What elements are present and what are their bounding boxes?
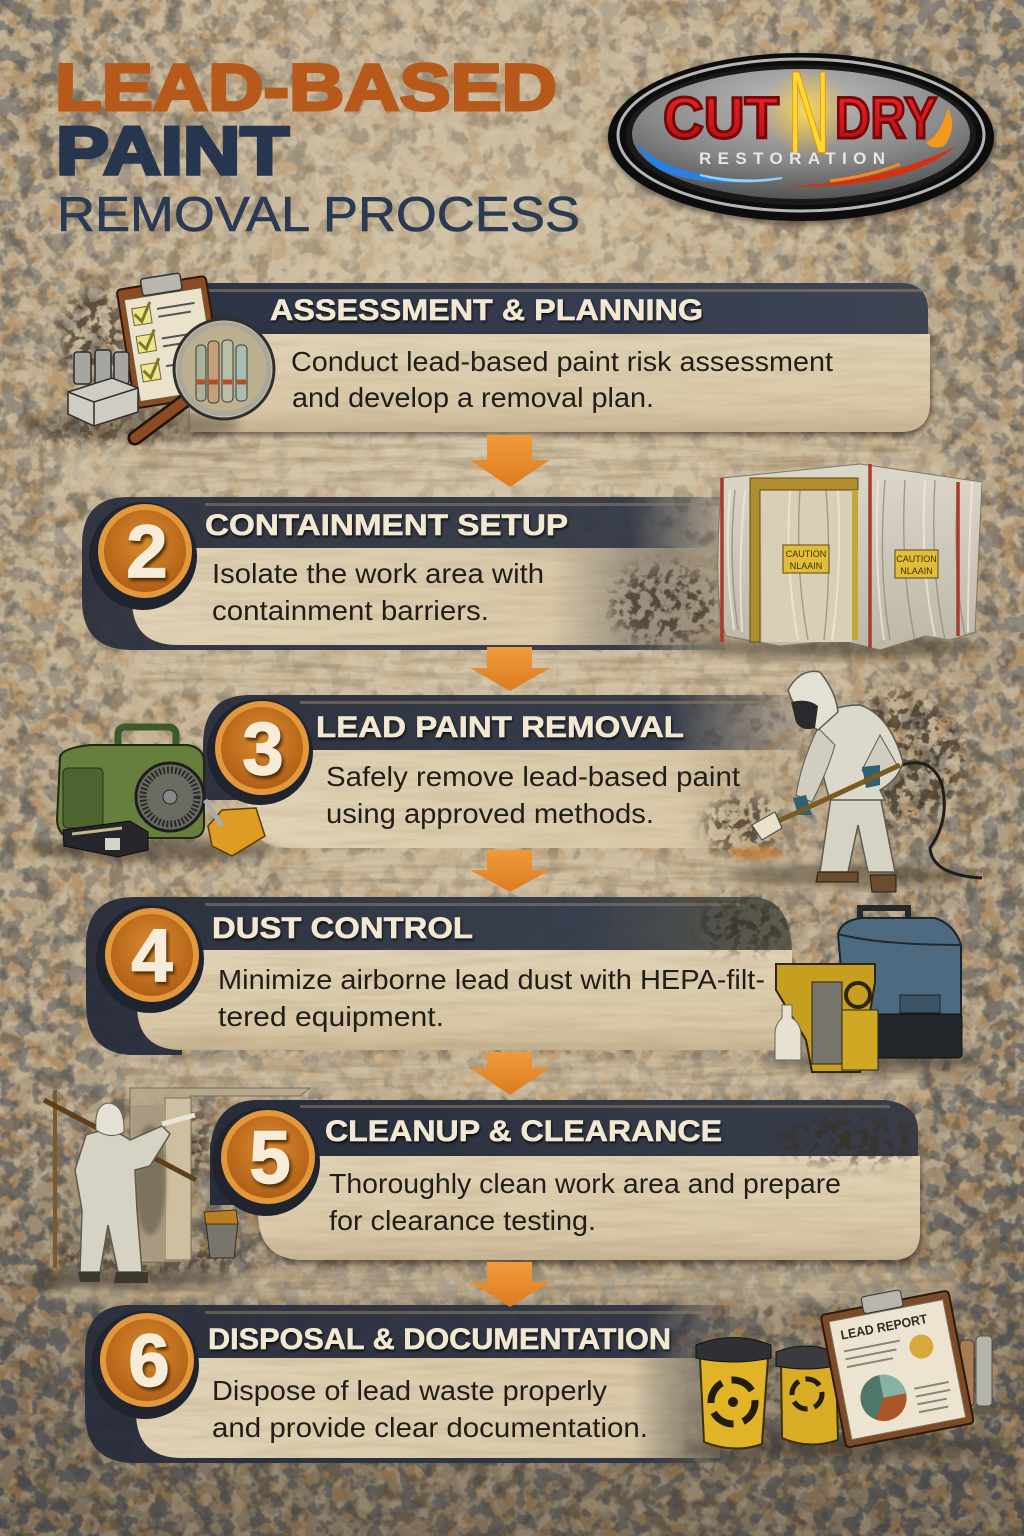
step 3 description — [326, 761, 740, 829]
step 2 number badge: 2 — [126, 510, 168, 593]
arrow 2 to 3 — [470, 647, 550, 691]
hood — [96, 1103, 124, 1136]
logo flame right — [926, 108, 952, 147]
step 4 heading: DUST CONTROL — [212, 912, 473, 945]
step 2 panel — [82, 497, 732, 650]
biohazard bin 2 — [776, 1346, 838, 1445]
clipboard — [115, 269, 224, 408]
caution sign left: CAUTION — [786, 549, 826, 559]
step 6 description: and provide clear documentation. — [212, 1412, 648, 1443]
bucket — [206, 1222, 238, 1258]
step 5 number badge — [212, 1108, 320, 1216]
logo wordmark: CUT — [663, 86, 779, 151]
fan — [136, 763, 204, 831]
legs — [820, 790, 895, 872]
blue unit — [838, 908, 962, 1058]
step 4 number badge: 4 — [131, 914, 173, 997]
icon: assessment clipboard, magnifier and samples — [20, 269, 274, 441]
step 6 description — [212, 1375, 648, 1443]
step 2 heading: CONTAINMENT SETUP — [205, 509, 568, 542]
step 3 body — [248, 750, 800, 848]
arm front — [862, 735, 897, 783]
step 3 description: Safely remove lead-based paint — [326, 761, 740, 792]
bottles — [74, 350, 129, 384]
arrow 1 to 2 — [470, 435, 550, 487]
step 6 body — [136, 1358, 720, 1458]
caution sign right: CAUTION — [896, 554, 937, 564]
caution sign left: NLAAIN — [790, 561, 822, 571]
step 1 body — [190, 334, 930, 432]
step 6 panel — [85, 1305, 730, 1463]
magnifier lens — [174, 319, 274, 419]
step 1 header band — [205, 283, 928, 334]
step 5 body — [258, 1156, 920, 1260]
case — [68, 378, 138, 426]
step 2 body — [132, 548, 730, 645]
icon: waste bins and lead report — [680, 1281, 1000, 1458]
respirator — [791, 701, 818, 729]
step 6 number badge — [91, 1311, 199, 1419]
caution sign right — [895, 550, 938, 578]
step 2 description: containment barriers. — [212, 595, 489, 626]
step 4 description — [218, 964, 765, 1032]
arrow 4 to 5 — [470, 1052, 550, 1095]
step 4 number badge — [96, 905, 204, 1013]
step 3 heading: LEAD PAINT REMOVAL — [316, 711, 684, 744]
sample tubes — [196, 340, 247, 403]
boots — [816, 872, 896, 892]
title line: lead-based: LEAD-BASED — [55, 50, 557, 124]
step 4 description: tered equipment. — [218, 1001, 444, 1032]
icon: HEPA equipment — [775, 908, 985, 1072]
caution sign left — [783, 545, 829, 573]
step 4 body — [137, 950, 792, 1050]
step 3 number badge — [207, 699, 313, 805]
report clipboard: LEAD REPORT — [839, 1311, 929, 1343]
step 6 number badge: 6 — [128, 1319, 170, 1402]
red poles — [722, 464, 958, 648]
step 3 description: using approved methods. — [326, 798, 654, 829]
icon: air machine and tools — [35, 727, 275, 862]
logo tagline: RESTORATION — [699, 149, 885, 168]
step 5 number badge: 5 — [249, 1116, 291, 1199]
arrow 5 to 6 — [470, 1262, 550, 1307]
icon: containment tent — [690, 464, 990, 658]
step 5 heading: CLEANUP & CLEARANCE — [325, 1115, 722, 1148]
arrow 3 to 4 — [470, 850, 550, 892]
pole — [53, 1090, 57, 1268]
logo wordmark: DRY — [835, 86, 937, 151]
step 1 description: Conduct lead-based paint risk assessment — [291, 346, 833, 377]
yellow unit — [776, 964, 878, 1072]
step 6 dark backing — [85, 1305, 730, 1463]
hood — [788, 671, 838, 730]
arm — [796, 728, 835, 802]
step 1 panel — [190, 283, 930, 432]
step 4 description: Minimize airborne lead dust with HEPA-filt- — [218, 964, 765, 995]
boots — [78, 1272, 148, 1283]
hose — [890, 763, 982, 878]
step 2 dark backing — [82, 497, 725, 650]
spray bottle — [775, 1005, 801, 1060]
suit — [75, 1126, 170, 1272]
yellow scraper — [208, 808, 265, 856]
step 1 description — [291, 346, 833, 413]
scraper pole — [770, 765, 900, 825]
doorway — [130, 1088, 310, 1262]
caution sign right: NLAAIN — [900, 566, 933, 576]
yellow door frame — [750, 478, 858, 642]
icon: worker in protective suit — [725, 671, 982, 892]
step 1 description: and develop a removal plan. — [292, 382, 654, 413]
step 5 header band — [210, 1100, 918, 1156]
title line: paint: PAINT — [56, 113, 289, 189]
torso — [815, 705, 903, 800]
step 2 description — [212, 558, 544, 626]
step 3 dark header — [203, 695, 800, 800]
step 5 description: for clearance testing. — [329, 1205, 596, 1236]
black battery box — [63, 821, 148, 857]
step 2 number badge — [89, 502, 197, 610]
pie chart — [856, 1371, 911, 1425]
step 1 heading: ASSESSMENT & PLANNING — [270, 294, 703, 327]
logo wordmark — [663, 86, 937, 151]
magnifier handle — [135, 400, 186, 438]
step 6 description: Dispose of lead waste properly — [212, 1375, 607, 1406]
biohazard bin 1 — [696, 1338, 771, 1449]
step 5 panel — [210, 1100, 920, 1260]
step 5 description: Thoroughly clean work area and prepare — [329, 1168, 841, 1199]
grime patches around the illustrations — [30, 280, 980, 1282]
step 3 panel — [203, 695, 800, 848]
tool — [162, 1115, 195, 1124]
step 3 number badge: 3 — [242, 707, 284, 790]
title — [55, 50, 580, 242]
bottles — [960, 1336, 992, 1406]
logo: Cut N Dry Restoration: N — [788, 47, 830, 179]
gloves — [793, 795, 812, 815]
step 5 description — [329, 1168, 841, 1236]
logo: Cut N Dry Restoration — [608, 47, 994, 221]
step 2 description: Isolate the work area with — [212, 558, 544, 589]
step 4 dark backing — [86, 897, 792, 1055]
report clipboard — [819, 1281, 974, 1448]
step 6 heading: DISPOSAL & DOCUMENTATION — [208, 1323, 671, 1356]
step 4 panel — [86, 897, 792, 1055]
logo swooshes — [637, 142, 956, 186]
icon: worker cleaning doorway — [20, 1088, 310, 1288]
title line: removal process: REMOVAL PROCESS — [57, 188, 580, 242]
